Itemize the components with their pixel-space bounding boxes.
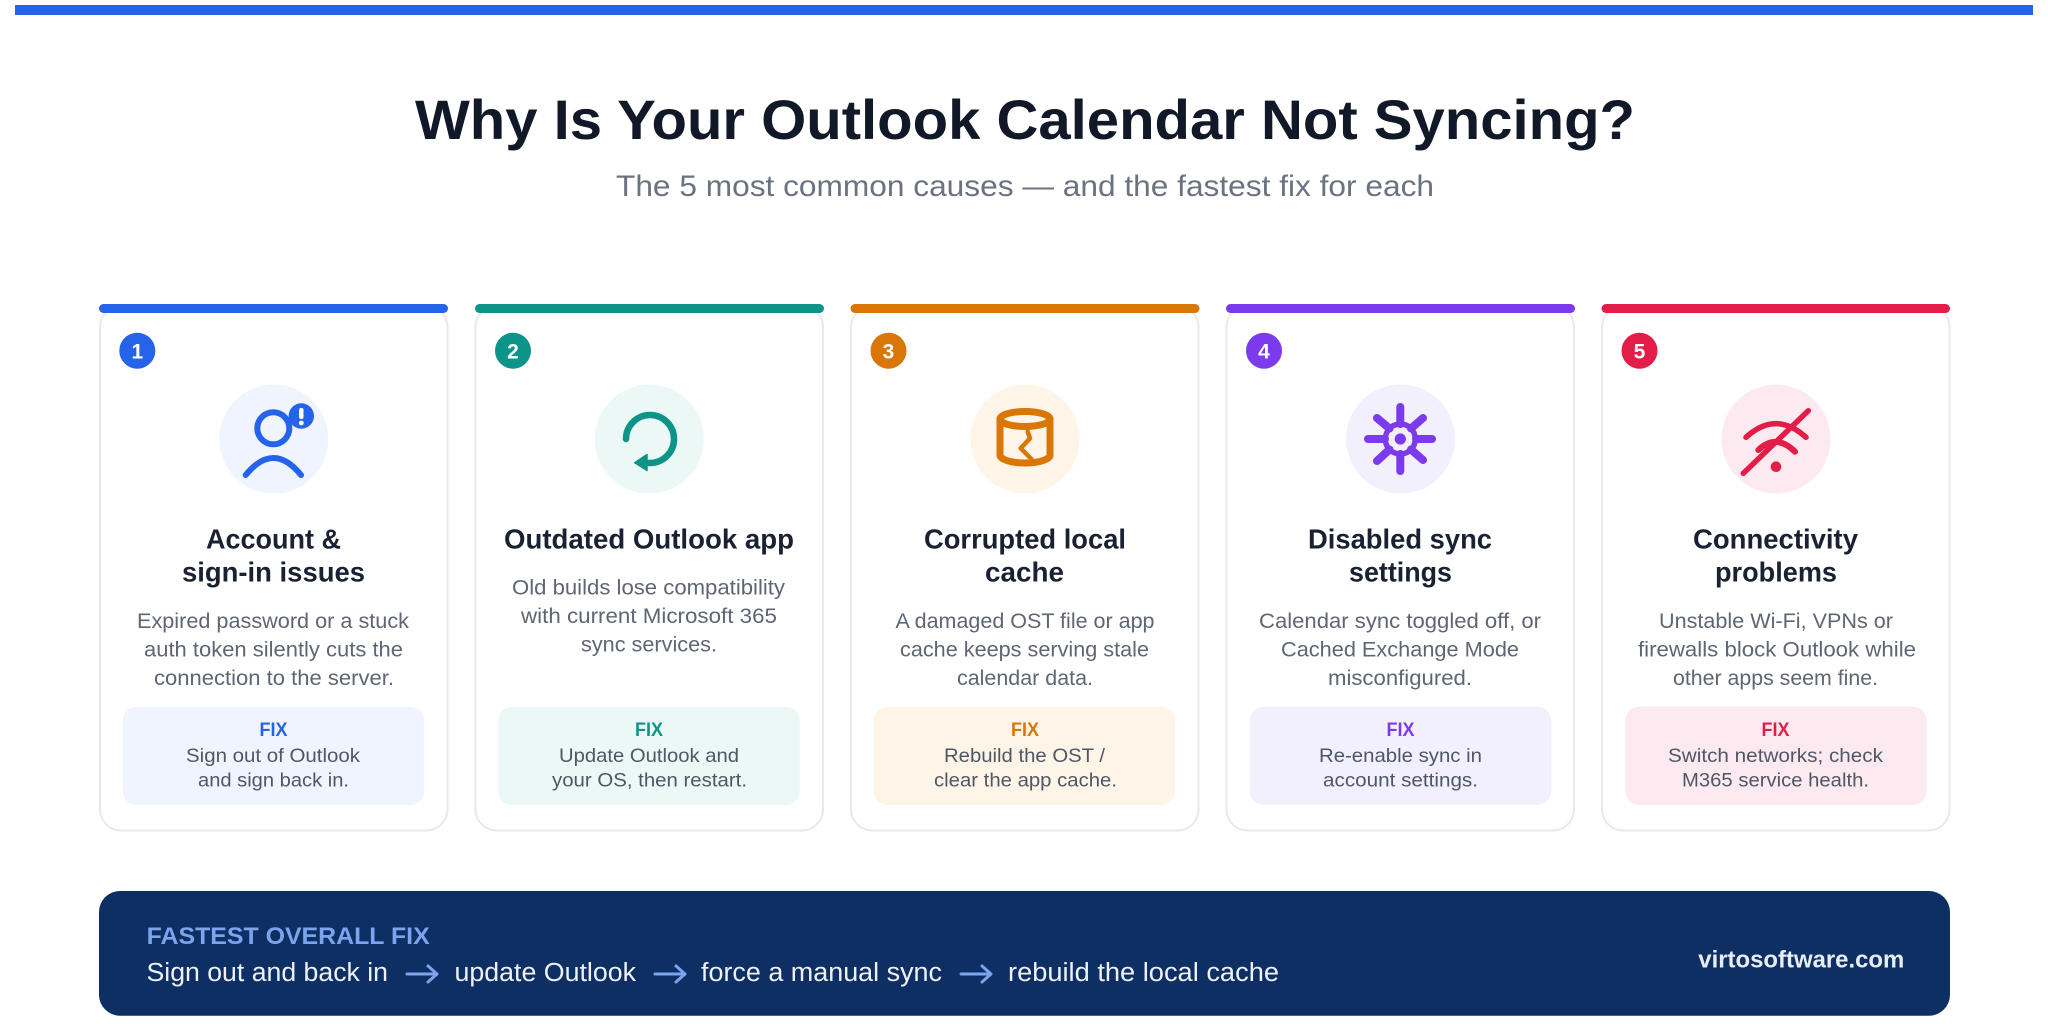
card 4 description: [1259, 610, 1541, 690]
card 3 description: A damaged OST file or app: [896, 610, 1154, 633]
panel: cause 3 corrupted cache: [850, 304, 1200, 830]
panel: cause 2 outdated app: [475, 304, 824, 830]
card 3 description: calendar data.: [957, 667, 1093, 690]
card 1 heading: sign-in issues: [182, 557, 365, 588]
card 3 fix box: clear the app cache.: [934, 770, 1117, 792]
card 3 heading: cache: [985, 557, 1064, 588]
card 4 number badge: 4: [1258, 340, 1270, 363]
banner heading: FASTEST OVERALL FIX: [147, 923, 430, 950]
card 4 description: misconfigured.: [1328, 667, 1472, 690]
card 1 description: auth token silently cuts the: [144, 638, 403, 662]
card 4 heading: [1308, 523, 1492, 588]
card 5 fix box: FIX: [1762, 720, 1790, 741]
card 4 number badge: [1246, 333, 1282, 369]
card 5 description: other apps seem fine.: [1673, 667, 1878, 690]
card 3 heading: [924, 523, 1126, 588]
card 3 fix box: Rebuild the OST /: [944, 745, 1106, 767]
card 4 fix box: Re-enable sync in: [1319, 745, 1482, 767]
card 4 heading: settings: [1349, 557, 1452, 588]
card 5 fix box: M365 service health.: [1682, 770, 1869, 792]
icon: refresh arrow: [595, 384, 704, 494]
banner steps: force a manual sync: [701, 959, 942, 987]
card 5 heading: problems: [1715, 557, 1837, 588]
card 4 fix box: account settings.: [1323, 770, 1478, 792]
arrow 1: [407, 966, 437, 982]
card 2 fix box: Update Outlook and: [559, 745, 739, 767]
card 1 heading: [182, 523, 365, 588]
card 5 heading: Connectivity: [1693, 523, 1858, 554]
card 4 description: Cached Exchange Mode: [1281, 638, 1519, 662]
banner steps: update Outlook: [454, 959, 636, 987]
card 3 accent bar: [850, 304, 1200, 313]
panel: cause 4 disabled sync: [1226, 304, 1575, 830]
card 2 fix box: your OS, then restart.: [552, 770, 747, 792]
card 5 number badge: 5: [1634, 340, 1646, 363]
card 4 fix box: FIX: [1386, 720, 1415, 741]
card 4 heading: Disabled sync: [1308, 523, 1492, 554]
banner steps: rebuild the local cache: [1008, 959, 1279, 987]
card 4 fix box: [1250, 707, 1551, 805]
panel: fastest overall fix banner: [99, 891, 1950, 1016]
card 5 number badge: [1622, 333, 1658, 369]
card 3 fix box: FIX: [1011, 720, 1039, 741]
card 2 accent bar: [475, 304, 824, 313]
card 5 heading: [1693, 523, 1858, 588]
card 2 description: with current Microsoft 365: [520, 605, 777, 628]
card 2 number badge: [495, 333, 531, 369]
card 1 fix box: FIX: [260, 720, 288, 741]
card 1 fix box: Sign out of Outlook: [186, 745, 360, 767]
card 1 number badge: [119, 333, 155, 369]
card 5 accent bar: [1602, 304, 1950, 313]
card 2 heading: Outdated Outlook app: [504, 523, 794, 554]
panel: cause 1 account and sign-in: [99, 304, 448, 830]
card 4 accent bar: [1226, 304, 1575, 313]
card 1 accent bar: [99, 304, 448, 313]
title: Why Is Your Outlook Calendar Not Syncing?: [415, 88, 1635, 151]
subtitle: The 5 most common causes — and the fastest fix for each: [616, 170, 1434, 203]
card 2 description: Old builds lose compatibility: [512, 576, 786, 599]
icon: user with alert: [219, 384, 328, 494]
card 1 heading: Account &: [206, 523, 341, 554]
banner steps: [146, 959, 1279, 987]
card 1 description: [137, 610, 409, 690]
card 1 description: Expired password or a stuck: [137, 610, 409, 633]
card 3 number badge: [870, 333, 906, 369]
website credit: virtosoftware.com: [1698, 946, 1904, 973]
card 3 description: cache keeps serving stale: [900, 638, 1149, 662]
icon: gear: [1346, 384, 1455, 494]
arrow 2: [655, 966, 685, 982]
card 3 number badge: 3: [883, 340, 894, 363]
card 1 fix box: [123, 707, 424, 805]
top accent bar: [15, 5, 2033, 15]
icon: wifi off: [1722, 384, 1830, 494]
card 1 number badge: 1: [131, 340, 143, 363]
card 1 fix box: and sign back in.: [198, 770, 349, 792]
card 5 description: [1638, 610, 1916, 690]
banner steps: Sign out and back in: [146, 959, 388, 987]
card 2 number badge: 2: [507, 340, 519, 363]
card 2 fix box: FIX: [635, 720, 663, 741]
card 2 description: sync services.: [581, 633, 717, 656]
card 1 description: connection to the server.: [154, 667, 394, 690]
card 5 fix box: Switch networks; check: [1668, 745, 1883, 767]
card 3 description: [896, 610, 1154, 690]
arrow 3: [961, 966, 991, 982]
card 3 fix box: [874, 707, 1175, 805]
icon: cracked cylinder: [970, 384, 1080, 494]
card 5 fix box: [1625, 707, 1927, 805]
card 2 fix box: [498, 707, 800, 805]
card 2 description: [512, 576, 786, 656]
card 3 heading: Corrupted local: [924, 523, 1126, 554]
card 5 description: firewalls block Outlook while: [1638, 638, 1916, 662]
panel: cause 5 connectivity: [1602, 304, 1950, 830]
card 4 description: Calendar sync toggled off, or: [1259, 610, 1541, 633]
card 5 description: Unstable Wi-Fi, VPNs or: [1659, 610, 1893, 633]
